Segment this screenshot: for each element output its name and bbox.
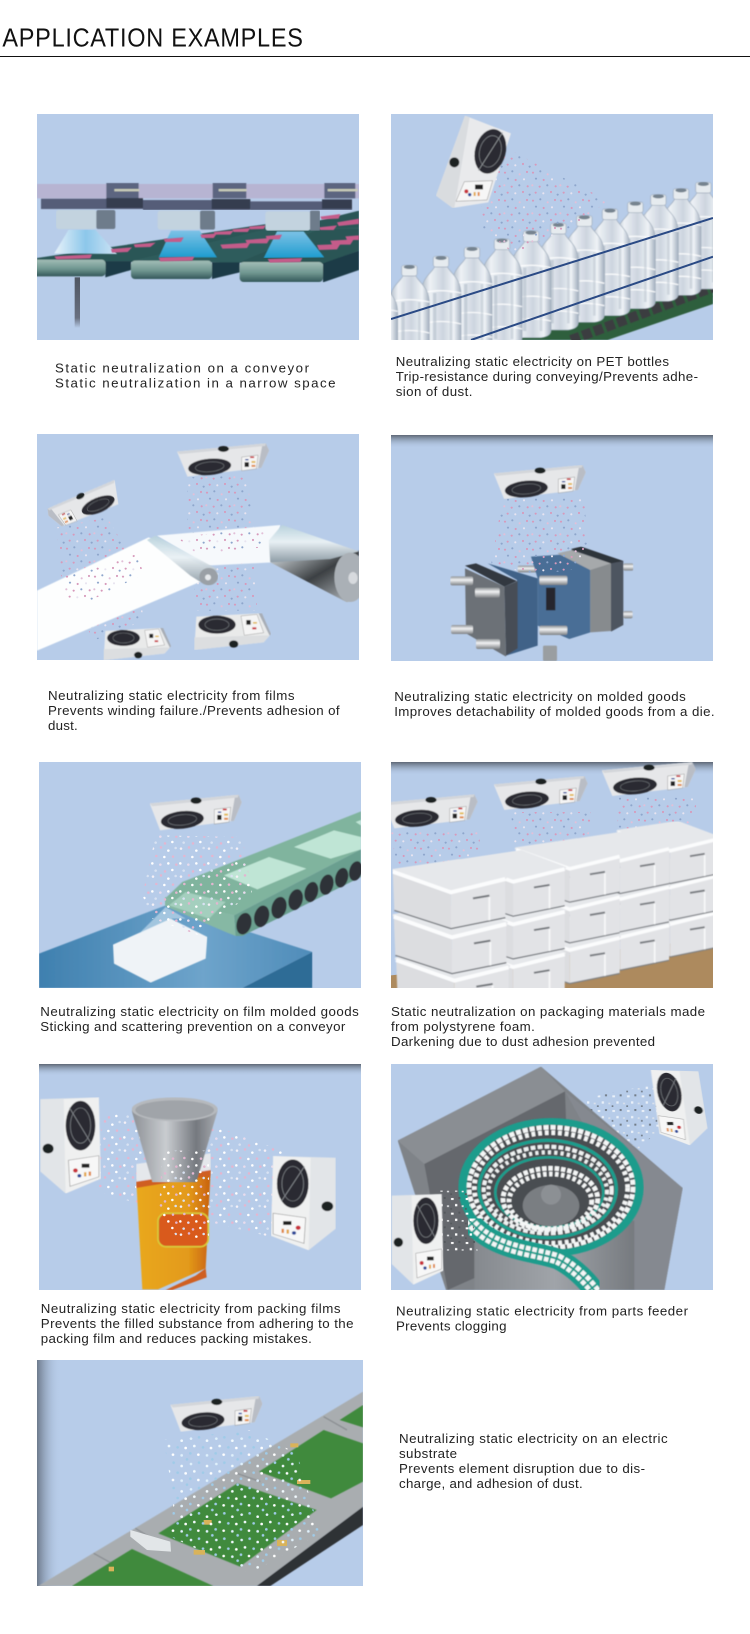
caption: electric substrate: charge, and adhesion of dust. <box>399 1476 583 1491</box>
caption: parts feeder: Prevents clogging <box>396 1318 506 1334</box>
caption: films: dust. <box>48 718 78 733</box>
icon: ionizer <box>436 116 511 208</box>
ion particles <box>96 1111 282 1237</box>
ion particles left <box>438 1191 478 1251</box>
icon: ionizer bottom left <box>392 1194 443 1285</box>
icon: ionizer left <box>48 480 118 526</box>
caption: polystyrene foam <box>391 1004 705 1049</box>
board component details <box>109 1443 310 1571</box>
panel: parts feeder image <box>391 1064 713 1297</box>
caption: film molded goods: Sticking and scattering prevention on a conveyor <box>40 1019 346 1034</box>
icon: ionizer bottom left <box>104 628 171 660</box>
icon: ionizer middle <box>494 776 588 810</box>
caption: films: Prevents winding failure./Prevents adhesion of <box>48 703 340 718</box>
ion particles <box>491 498 588 575</box>
panel: films image <box>37 434 366 660</box>
caption: packing films: packing film and reduces packing mistakes. <box>41 1331 312 1346</box>
feeder chute <box>468 1219 599 1297</box>
ion particles over film <box>62 527 264 601</box>
panel: electric substrate image <box>37 1360 363 1586</box>
caption: parts feeder <box>396 1304 689 1334</box>
ion particles on bag <box>159 1151 209 1241</box>
caption: molded goods: Neutralizing static electricity on molded goods <box>394 689 686 704</box>
icon: ionizer <box>170 1396 262 1432</box>
icon: ionizer <box>150 795 242 831</box>
funnel <box>132 1097 218 1182</box>
ion particles <box>164 1430 320 1573</box>
table <box>39 905 312 988</box>
caption: electric substrate: substrate <box>399 1446 457 1461</box>
icon: ionizer <box>494 465 586 499</box>
caption: electric substrate: Prevents element disruption due to dis- <box>399 1461 645 1476</box>
filling bag <box>136 1153 211 1290</box>
small roller <box>147 536 218 585</box>
caption: polystyrene foam: Static neutralization on packaging materials made <box>391 1004 705 1019</box>
ion particles <box>391 798 696 864</box>
conveyor <box>38 1392 363 1586</box>
caption: PET bottles: Trip-resistance during conveying/Prevents adhe- <box>396 369 698 384</box>
caption: electric substrate: Neutralizing static electricity on an electric <box>399 1431 668 1446</box>
large roll <box>269 525 366 602</box>
conveyor belts <box>30 211 359 282</box>
caption: film molded goods <box>40 1004 359 1034</box>
caption: electric substrate <box>399 1431 668 1491</box>
blue ion beams <box>54 230 324 258</box>
caption: films <box>48 688 340 733</box>
caption: parts feeder: Neutralizing static electricity from parts feeder <box>396 1304 689 1318</box>
icon: ionizer right <box>602 762 696 796</box>
guide rails <box>391 218 713 340</box>
white molded block <box>113 907 207 983</box>
icon: ionizer bottom right <box>194 613 271 650</box>
ion particles <box>481 151 608 254</box>
icon: ionizer right <box>271 1156 336 1250</box>
panel: packing films image <box>39 1064 361 1290</box>
panel: PET bottles image <box>358 114 723 381</box>
caption: packing films <box>41 1301 354 1346</box>
icon: ionizer top <box>177 443 269 477</box>
overhead rail <box>37 183 359 210</box>
panel: conveyor image <box>30 114 359 340</box>
icon: ionizer left <box>384 794 478 829</box>
caption: molded goods: Improves detachability of molded goods from a die. <box>394 704 715 719</box>
caption: molded goods <box>394 689 715 719</box>
caption: packing films: Neutralizing static electricity from packing films <box>41 1301 341 1316</box>
icon: ionizer top right <box>649 1070 710 1145</box>
ion particles <box>564 1084 664 1154</box>
caption: conveyor <box>55 360 335 390</box>
mold tool <box>450 547 633 661</box>
feeder bowl <box>458 1118 644 1257</box>
title: APPLICATION EXAMPLES <box>2 23 303 53</box>
icon: ionizer left <box>40 1097 101 1193</box>
ion particles behind film <box>57 476 257 641</box>
cameras <box>56 210 320 231</box>
panel: film molded goods image <box>39 762 364 988</box>
panel: polystyrene foam image <box>384 762 719 1017</box>
grey housing <box>398 1067 683 1290</box>
circuit boards <box>72 1405 363 1586</box>
caption: films: Neutralizing static electricity from films <box>48 688 295 703</box>
green conveyor <box>522 288 713 340</box>
caption: conveyor: Static neutralization on a conveyor <box>55 360 310 376</box>
caption: PET bottles: sion of dust. <box>396 384 472 399</box>
film strip <box>37 525 280 651</box>
wooden floor <box>391 939 713 988</box>
support post <box>75 277 80 328</box>
sensor clip <box>130 1530 171 1552</box>
caption: packing films: Prevents the filled substance from adhering to the <box>41 1316 354 1331</box>
caption: polystyrene foam: Darkening due to dust adhesion prevented <box>391 1034 655 1049</box>
caption: polystyrene foam: from polystyrene foam. <box>391 1019 535 1034</box>
panel: molded goods image <box>391 435 713 661</box>
caption: PET bottles <box>396 354 698 399</box>
caption: conveyor: Static neutralization in a narrow space <box>55 376 335 390</box>
caption: film molded goods: Neutralizing static electricity on film molded goods <box>40 1004 359 1019</box>
bottles <box>391 182 713 340</box>
green conveyor <box>165 811 364 936</box>
ion particles <box>142 835 252 935</box>
pink workpieces <box>54 214 359 263</box>
foam box stacks <box>392 822 713 988</box>
caption: PET bottles: Neutralizing static electricity on PET bottles <box>396 354 669 369</box>
